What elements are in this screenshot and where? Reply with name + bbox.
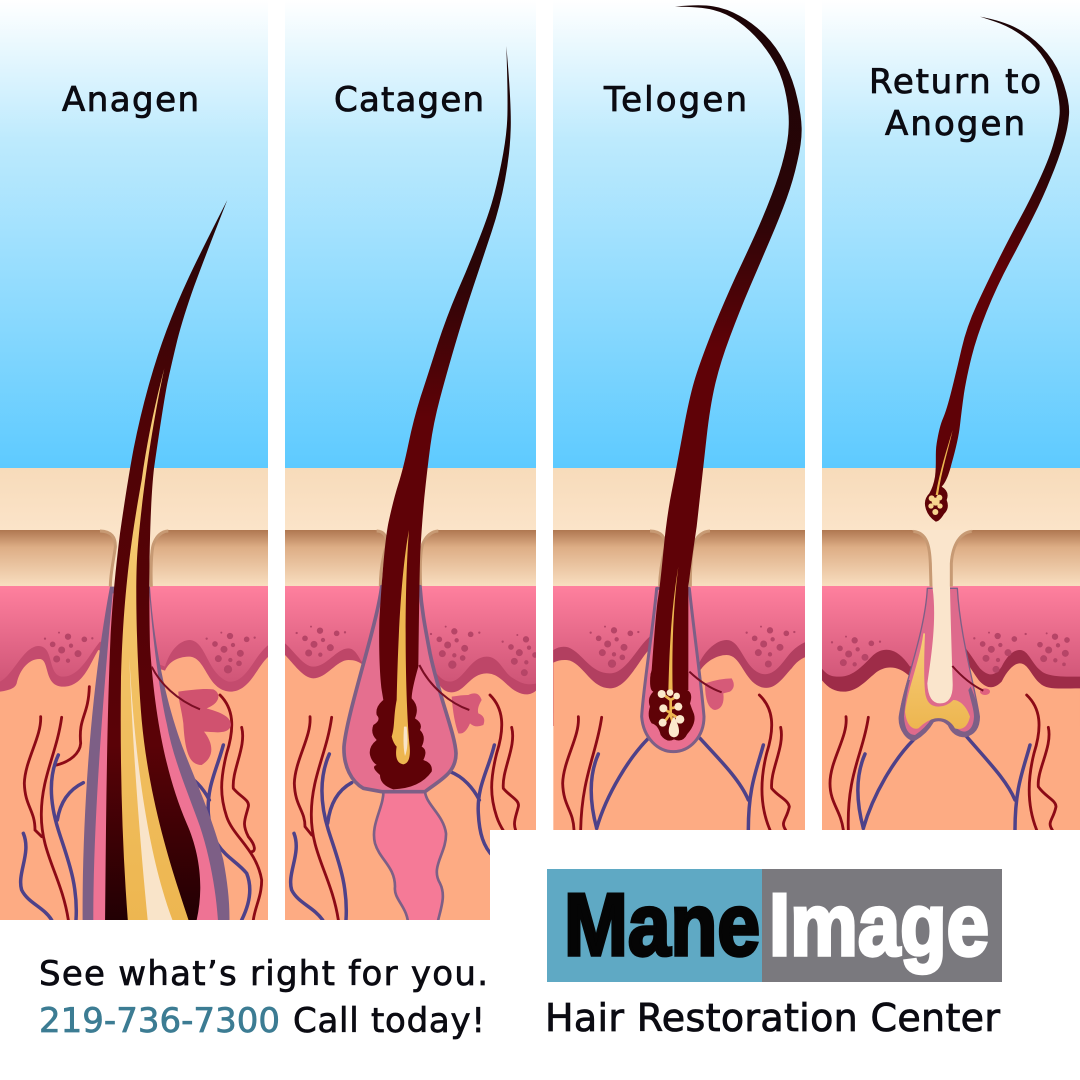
sky background: [822, 0, 1080, 468]
dermis wave band: [285, 644, 536, 694]
call to action: Call today!: [293, 1001, 485, 1041]
heading: Anagen: Anagen: [62, 80, 199, 120]
hair shaft: [650, 5, 802, 690]
dots right: [974, 632, 1069, 672]
follicle outer shade: [899, 680, 979, 740]
heading: Telogen: Telogen: [603, 80, 747, 120]
logo: ManeImage: Mane: [564, 875, 760, 974]
veins: [291, 695, 519, 920]
dermis wave band: [0, 640, 268, 688]
dots right: [430, 626, 537, 676]
hair core: [928, 430, 953, 515]
lower dermis: [553, 648, 807, 830]
dots left: [44, 632, 93, 662]
veins: [21, 687, 262, 920]
call to action: See what’s right for you.: [39, 954, 488, 994]
hair shaft: [105, 200, 227, 927]
empty follicle channel: [912, 530, 973, 703]
panel: Return to Anogen: [822, 0, 1080, 830]
lobed root: [649, 673, 695, 741]
epidermis layers: [553, 468, 805, 726]
sky background: [553, 0, 805, 468]
hair shaft and lobed root: [370, 46, 511, 789]
epidermis layers: [822, 468, 1080, 726]
dermal papilla: [374, 788, 446, 927]
dermis wave band: [553, 637, 805, 688]
lower dermis: [285, 655, 537, 927]
sebaceous gland: [689, 672, 734, 710]
heading: Return to Anogen: [869, 62, 1041, 144]
heading: Catagen: Catagen: [334, 80, 484, 120]
panel: Anagen: [0, 0, 268, 927]
follicle opening: [648, 530, 712, 587]
panel: Catagen: [285, 0, 537, 927]
heading: Return to Anogen: Return to: [869, 62, 1041, 102]
panel: Telogen: [553, 0, 807, 830]
logo: ManeImage: Image: [769, 875, 989, 974]
skin and follicle illustration: [822, 17, 1080, 830]
dots right: [746, 626, 795, 667]
hair core: [392, 530, 410, 764]
hair core: [121, 368, 191, 927]
follicle opening: [375, 530, 440, 587]
sky background: [285, 0, 536, 468]
hair follicle sheath: [642, 588, 704, 752]
dots left: [590, 626, 639, 667]
heading: Return to Anogen: Anogen: [885, 104, 1025, 144]
hair follicle sheath: [344, 587, 456, 792]
shed hair: [925, 17, 1069, 522]
sebaceous gland: [152, 667, 231, 765]
sebaceous gland: [952, 666, 990, 695]
hair follicle sheath: [83, 587, 229, 927]
dots right: [206, 632, 255, 673]
follicle bulb: [905, 633, 970, 729]
call to action: [39, 954, 488, 1041]
hair core: [658, 567, 684, 737]
logo: ManeImage: [547, 869, 1002, 982]
veins: [830, 695, 1056, 830]
dots left: [831, 636, 881, 666]
skin and follicle illustration: [285, 46, 537, 927]
lower dermis: [822, 653, 1080, 830]
skin and follicle illustration: [553, 5, 807, 830]
dermis wave band: [822, 642, 1080, 720]
lower dermis: [0, 650, 268, 927]
tagline: Hair Restoration Center: Hair Restoration Center: [545, 996, 1000, 1040]
follicle sheath: [899, 588, 979, 740]
follicle opening: [97, 530, 170, 587]
veins: [563, 695, 789, 830]
sky background: [0, 0, 268, 468]
sebaceous gland: [419, 665, 484, 734]
skin and follicle illustration: [0, 200, 268, 927]
epidermis layers: [0, 468, 268, 682]
call to action: 219-736-7300: [39, 1001, 280, 1041]
epidermis layers: [285, 468, 536, 684]
dots left: [296, 626, 346, 656]
